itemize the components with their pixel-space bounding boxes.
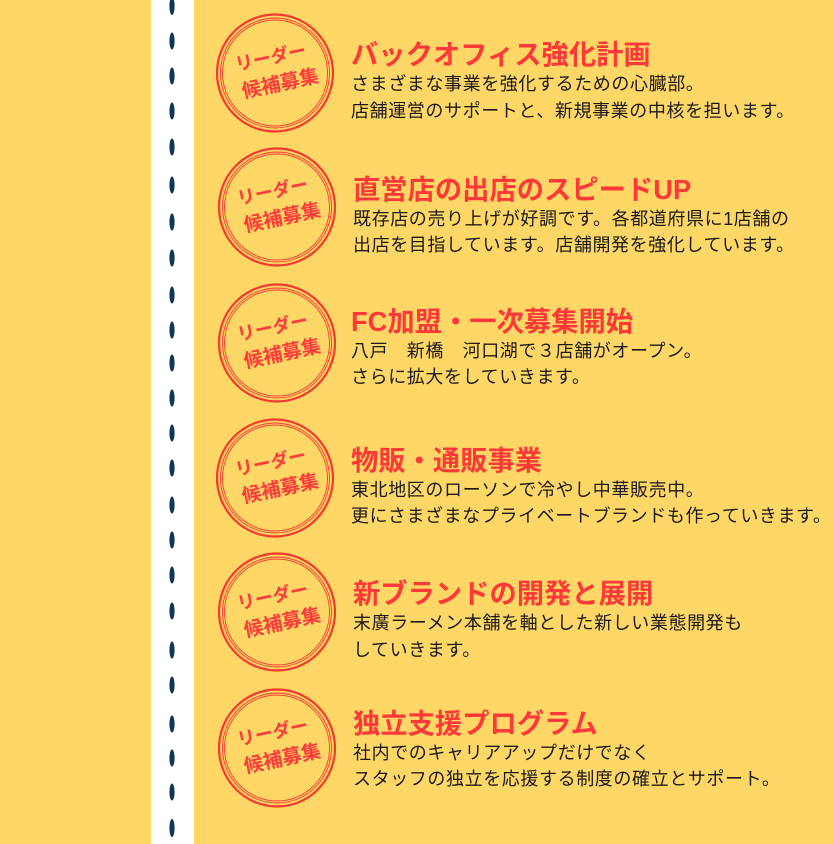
body 1: さまざまな事業を強化するための心臓部。 — [351, 74, 704, 94]
body 1: 店舗運営のサポートと、新規事業の中核を担います。 — [351, 100, 795, 120]
heading 5: 新ブランドの開発と展開 — [353, 578, 653, 609]
stamp 2 — [218, 147, 336, 267]
body 3 — [351, 340, 702, 387]
body 4 — [351, 480, 832, 526]
white vertical strip with navy stitches — [151, 0, 194, 844]
stamp 3: 候補募集 — [242, 335, 323, 373]
stamp 6: 候補募集 — [242, 740, 323, 778]
stamp 5 — [218, 552, 336, 672]
stamp 6: リーダー — [235, 714, 310, 750]
body 2: 既存店の売り上げが好調です。各都道府県に1店舗の — [353, 208, 790, 228]
heading 4: 物販・通販事業 — [351, 445, 542, 476]
body 2: 出店を目指しています。店舗開発を強化しています。 — [353, 235, 795, 255]
stamp 5: 候補募集 — [242, 604, 323, 642]
body 5 — [353, 613, 743, 660]
body 3: さらに拡大をしていきます。 — [351, 367, 590, 387]
body 6 — [353, 742, 780, 789]
body 6: 社内でのキャリアアップだけでなく — [353, 742, 651, 762]
heading 6: 独立支援プログラム — [353, 708, 598, 739]
stamp 1: リーダー — [233, 39, 308, 75]
body 6: スタッフの独立を応援する制度の確立とサポート。 — [353, 769, 780, 789]
heading 1: バックオフィス強化計画 — [351, 39, 651, 70]
stamp 4: 候補募集 — [240, 470, 321, 508]
body 4: 更にさまざまなプライベートブランドも作っていきます。 — [351, 506, 832, 526]
stamp 4 — [216, 418, 334, 538]
heading 2: 直営店の出店のスピードUP — [353, 174, 691, 205]
stamp 5: リーダー — [235, 578, 310, 614]
stamp 1 — [216, 13, 334, 133]
stamp 2: リーダー — [235, 173, 310, 209]
stamp 4: リーダー — [233, 444, 308, 480]
stamp 1: 候補募集 — [240, 65, 321, 103]
heading 3: FC加盟・一次募集開始 — [351, 306, 633, 337]
body 5: 末廣ラーメン本舗を軸とした新しい業態開発も — [353, 613, 743, 633]
body 1 — [351, 74, 795, 120]
stamp 3: リーダー — [235, 309, 310, 345]
body 5: していきます。 — [353, 640, 481, 660]
stamp 3 — [218, 283, 336, 403]
stamp 2: 候補募集 — [242, 199, 323, 237]
body 2 — [353, 208, 795, 255]
body 3: 八戸 新橋 河口湖で３店舗がオープン。 — [351, 340, 702, 360]
stamp 6 — [218, 688, 336, 808]
body 4: 東北地区のローソンで冷やし中華販売中。 — [351, 480, 704, 500]
